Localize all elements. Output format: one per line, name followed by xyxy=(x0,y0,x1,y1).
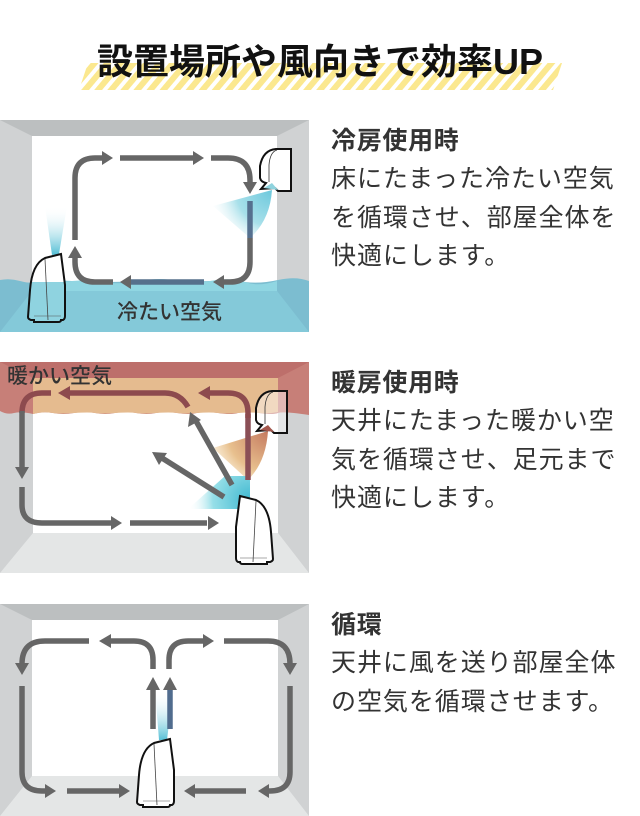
text block: cooling xyxy=(331,127,616,270)
cold air layer xyxy=(0,278,309,332)
air conditioner xyxy=(256,391,287,433)
room walls xyxy=(0,120,309,332)
label: cold air: 冷たい空気 xyxy=(117,301,222,324)
text block: circulation xyxy=(331,611,616,716)
dehumidifier xyxy=(137,739,174,807)
room walls xyxy=(0,362,309,573)
text block: cooling: 冷房使用時 xyxy=(331,127,460,155)
air conditioner warm fan xyxy=(213,431,268,480)
text block: circulation: 天井に風を送り部屋全体 xyxy=(331,649,616,677)
label: warm air: 暖かい空気 xyxy=(7,365,112,388)
text block: heating: 天井にたまった暖かい空 xyxy=(331,407,615,435)
air conditioner xyxy=(260,149,291,191)
panel: heating room xyxy=(0,362,309,573)
dehumidifier jet xyxy=(45,206,67,255)
text block: cooling: 床にたまった冷たい空気 xyxy=(331,165,615,193)
dehumidifier cool fan xyxy=(188,476,250,509)
text block: heating: 気を循環させ、足元まで xyxy=(331,446,616,474)
arrows: heating circulation xyxy=(15,386,248,530)
text block: heating: 暖房使用時 xyxy=(331,369,460,397)
text block: heating xyxy=(331,369,616,512)
text block: circulation: 循環 xyxy=(331,611,382,639)
air conditioner fan xyxy=(213,190,272,238)
text block: cooling: 快適にします。 xyxy=(331,242,510,270)
warm air layer xyxy=(0,362,309,415)
arrows: circulation xyxy=(15,634,297,798)
text block: circulation: の空気を循環させます。 xyxy=(331,688,614,716)
title highlight band xyxy=(79,63,562,90)
panel: cooling room xyxy=(0,120,309,332)
text block: heating: 快適にします。 xyxy=(331,484,510,512)
room walls xyxy=(0,604,309,816)
arrows: cooling circulation xyxy=(68,151,257,289)
dehumidifier xyxy=(236,496,273,564)
dehumidifier xyxy=(28,254,65,322)
title: 設置場所や風向きで効率UP xyxy=(97,41,543,82)
dehumidifier jet xyxy=(155,690,173,740)
panel: circulation room xyxy=(0,604,309,816)
text block: cooling: を循環させ、部屋全体を xyxy=(331,204,616,232)
